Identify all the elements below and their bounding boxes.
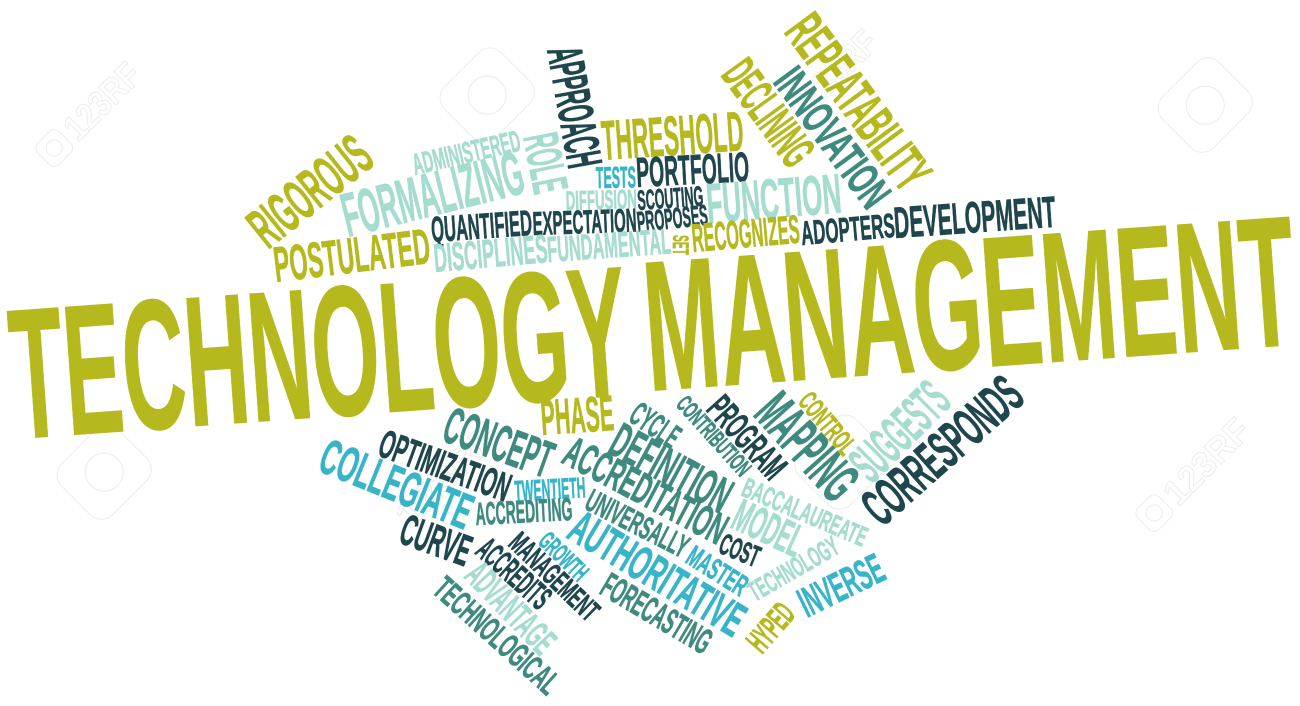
word cloud: upper words: RECOGNIZES: [690, 208, 801, 261]
word: definition: DEFINITION: [601, 412, 742, 524]
word: control: CONTROL: [792, 386, 862, 461]
word: curve: CURVE: [394, 505, 478, 576]
word: growth: GROWTH: [533, 526, 595, 587]
watermark bottom right: 123RF: [1155, 410, 1258, 513]
word cloud: upper words: PORTFOLIO: [635, 143, 750, 196]
word cloud: upper words: TESTS: [596, 161, 636, 195]
word: model: MODEL: [725, 489, 813, 567]
word: innovation: INNOVATION: [764, 57, 901, 218]
word cloud: upper words: APPROACH: [536, 42, 613, 172]
word cloud: lower words: PHASE: [539, 385, 616, 446]
watermark top left: 123RF: [55, 54, 149, 148]
word cloud: lower words: CONCEPT: [436, 397, 561, 490]
word: accredits: ACCREDITS: [469, 531, 559, 617]
word cloud: upper words: QUANTIFIED: [430, 202, 533, 250]
word cloud: upper words: FUNCTION: [704, 162, 844, 235]
word: inverse: INVERSE: [790, 544, 892, 626]
word cloud: upper words: [236, 2, 1057, 293]
word: hyped: HYPED: [739, 595, 803, 660]
word cloud: lower words: SUGGESTS: [838, 370, 962, 493]
word cloud: upper words: FORMALIZING: [335, 139, 531, 251]
word cloud: upper words: EXPECTATION: [532, 201, 637, 242]
word: master: MASTER: [680, 540, 754, 603]
word: repeatability: REPEATABILITY: [773, 2, 944, 202]
title: technology management: TECHNOLOGY: [3, 228, 634, 479]
word cloud: lower words: TWENTIETH: [514, 472, 586, 508]
watermark egg top right: [1151, 51, 1259, 159]
word: management: MANAGEMENT: [502, 526, 606, 628]
word cloud: upper words: ROLE: [512, 128, 579, 198]
watermark centre bottom: 123RF: [387, 415, 508, 536]
word cloud: upper words: PROPOSES: [635, 200, 709, 239]
word: rigorous: RIGOROUS: [236, 123, 385, 260]
word: declining: DECLINING: [711, 49, 826, 177]
word cloud: upper words: POSTULATED: [271, 218, 433, 293]
word cloud: upper words: SCOUTING: [636, 180, 704, 216]
word: optimization: OPTIMIZATION: [373, 422, 517, 510]
word cloud: upper words: THRESHOLD: [599, 99, 745, 172]
word cloud: upper words: ADMINISTERED: [409, 125, 524, 182]
watermark top left: [29, 54, 149, 173]
word: corresponds: CORRESPONDS: [850, 364, 1035, 537]
word: cost: COST: [714, 528, 765, 574]
word: adopters: ADOPTERS: [799, 207, 896, 253]
word: collegiate: COLLEGIATE: [312, 428, 481, 540]
watermark top centre right: 123RF: [792, 22, 886, 116]
watermark egg top centre: [433, 41, 541, 149]
watermark: stock logos: [29, 22, 1259, 538]
word cloud: lower words: ACCREDITING: [474, 491, 573, 532]
word: cycle: CYCLE: [623, 395, 688, 456]
word cloud: upper words: DIFFUSION: [565, 184, 637, 216]
word: contribution: CONTRIBUTION: [671, 391, 756, 482]
word: universally: UNIVERSALLY: [580, 482, 695, 565]
word: technology small: TECHNOLOGY: [742, 530, 845, 607]
word cloud: upper words: SET: [668, 235, 693, 255]
word: baccalaureate: BACCALAUREATE: [738, 472, 872, 552]
word: mapping: MAPPING: [742, 380, 872, 514]
word: program: PROGRAM: [698, 388, 794, 488]
watermark bottom right: [1129, 410, 1258, 538]
word cloud: upper words: DISCIPLINES: [432, 227, 549, 281]
word cloud: lower words: [312, 364, 1035, 702]
word: accreditation: ACCREDITATION: [555, 428, 736, 554]
watermark egg bottom left: [50, 418, 158, 526]
watermark egg centre right: [788, 408, 896, 516]
word cloud: upper words: FUNDAMENTAL: [546, 220, 672, 270]
text: DEVELOPMENT: [892, 188, 1057, 248]
